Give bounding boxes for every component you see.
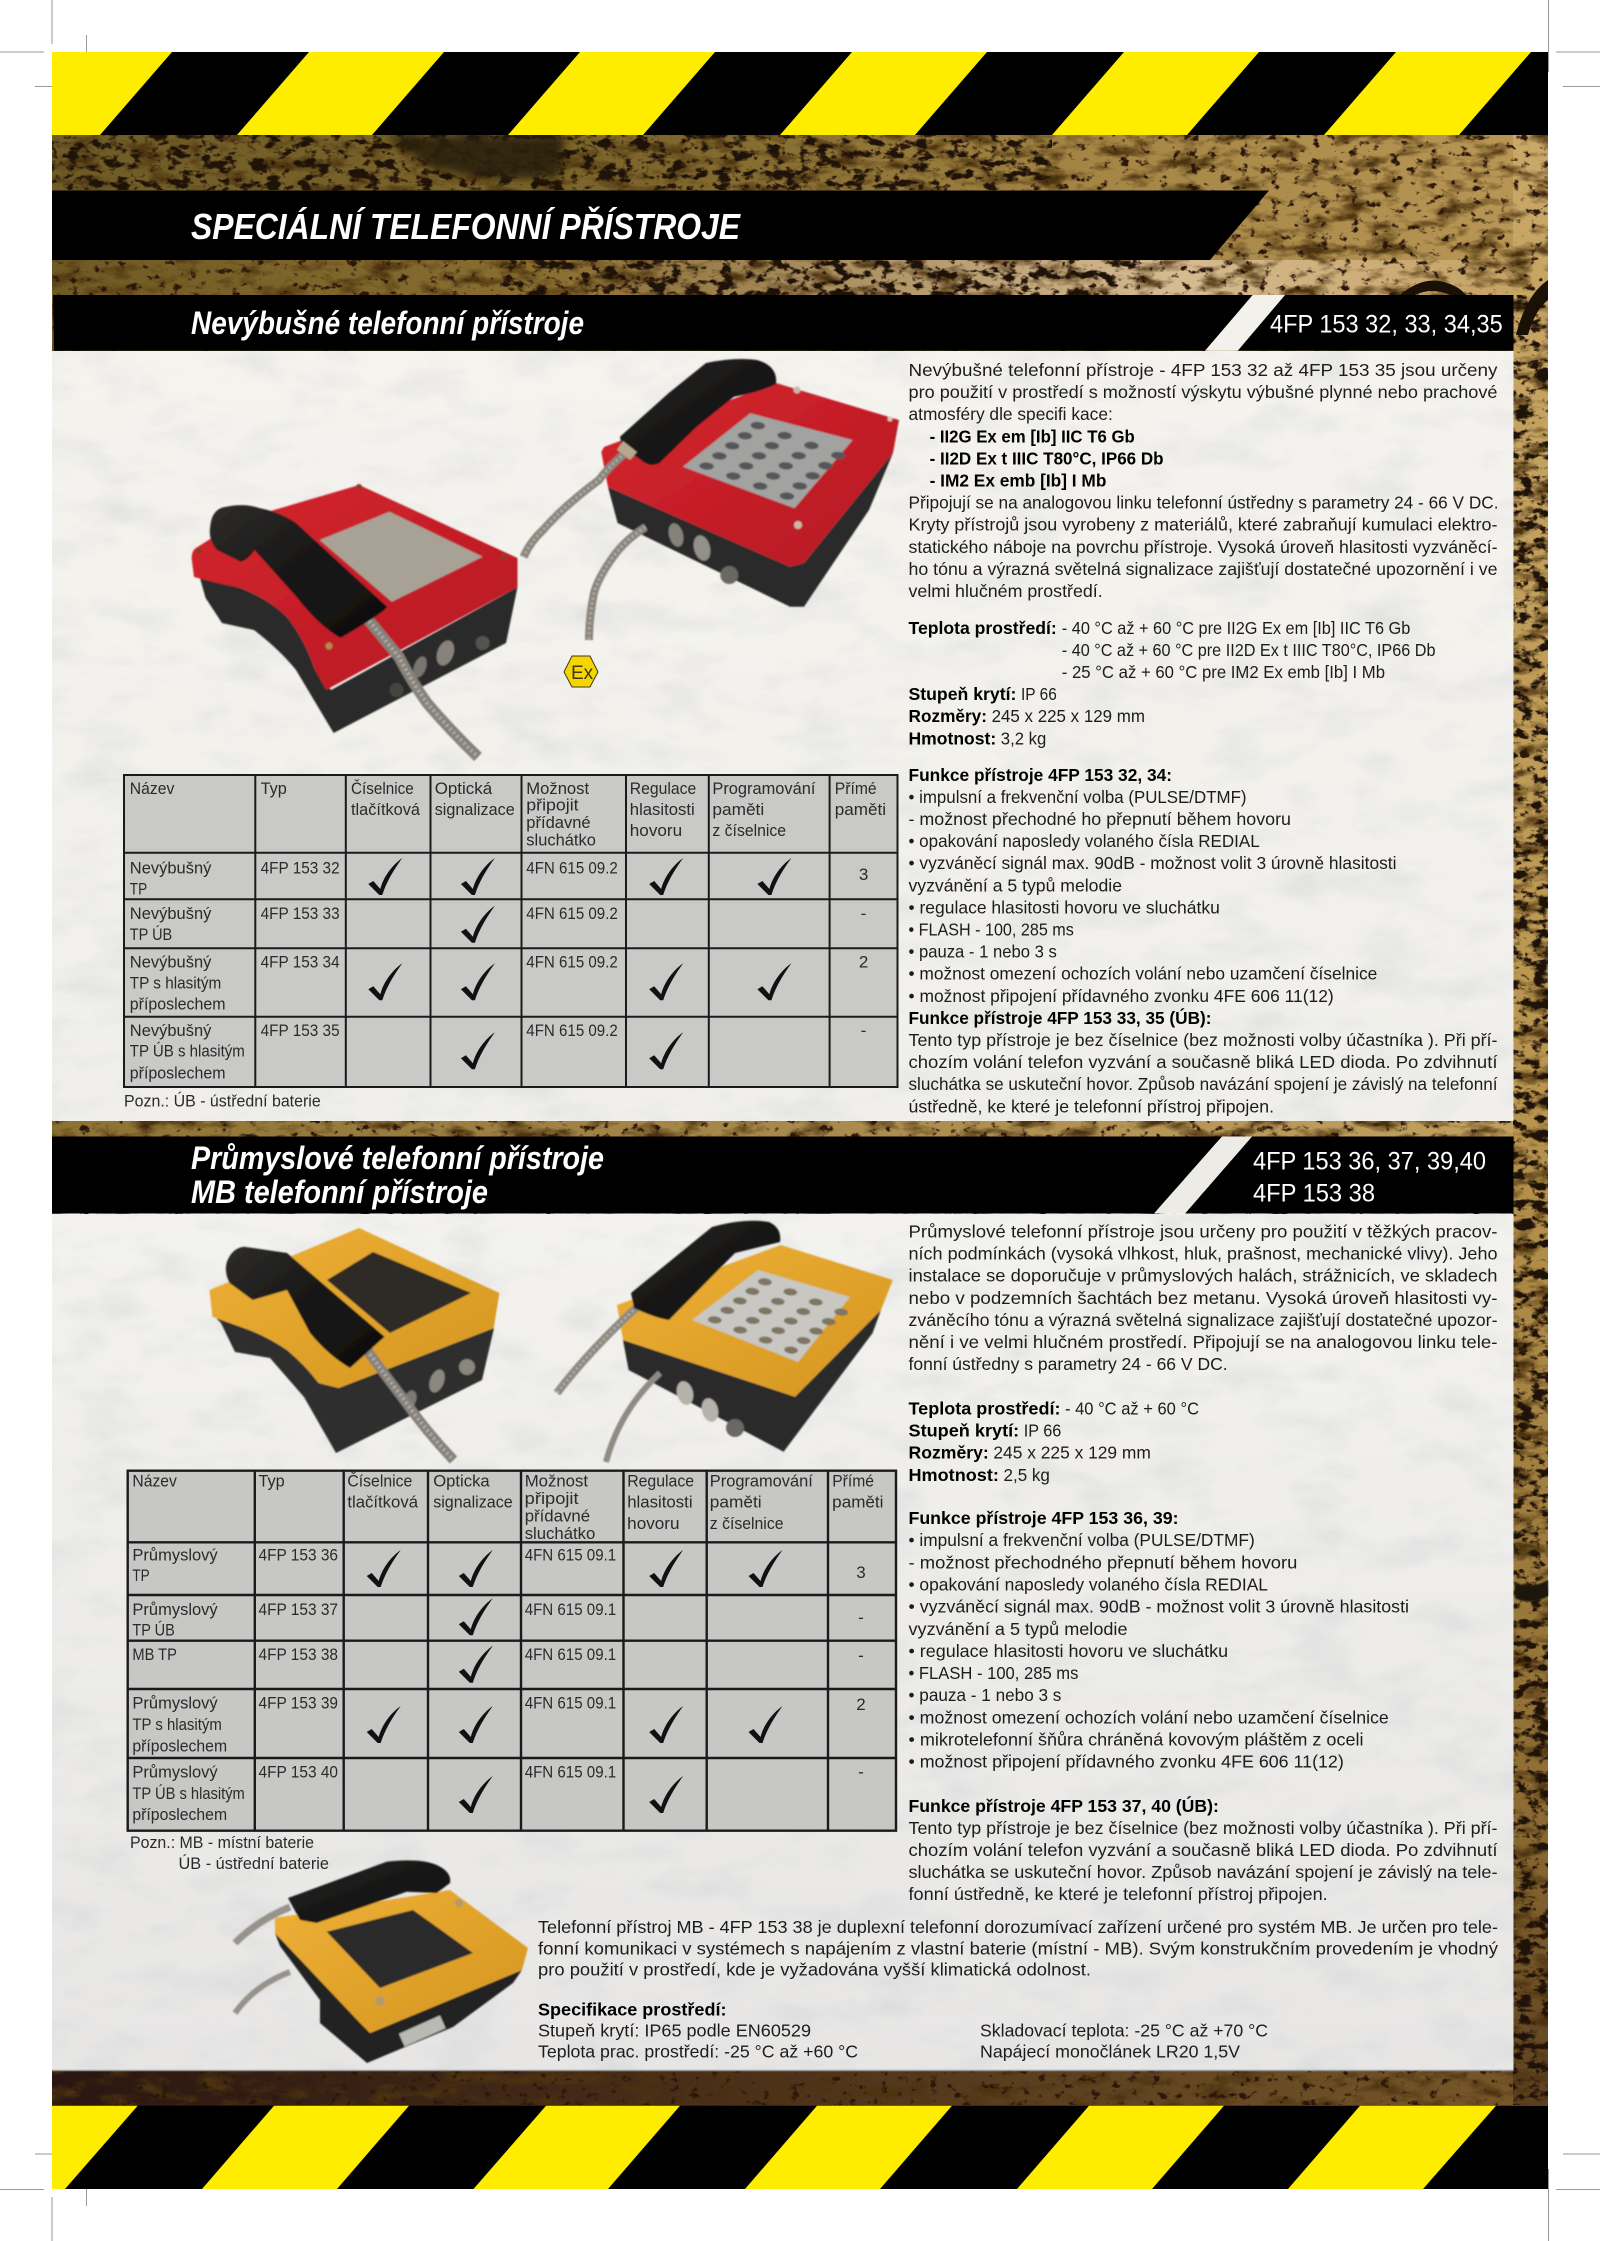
table row 4FP 153 32: Nevýbušný: [130, 858, 212, 877]
specifications: explosion-proof: [908, 618, 1436, 748]
description text: explosion-proof: Nevýbušné telefonní přístroje - 4FP 153 32 až 4FP 153 35 jsou určeny: [908, 360, 1498, 380]
table row 4FP 153 34: 4FN 615 09.2: [526, 952, 618, 971]
table header row: hovoru: [630, 821, 682, 840]
table header row: z číselnice: [710, 1514, 784, 1533]
section header bar: industrial: 4FP 153 36, 37, 39,40: [1253, 1148, 1486, 1176]
description text: industrial: zváněcího tónu a výrazná světelná signalizace zajišťují dostatečné upozor-: [908, 1310, 1498, 1330]
table row 4FP 153 37: [132, 1598, 864, 1640]
function list: industrial: Funkce přístroje 4FP 153 37, 40 (ÚB):: [908, 1795, 1219, 1816]
photo: red phone without keypad: [192, 484, 518, 757]
description text: industrial: instalace se doporučuje v průmyslových halách, strážnicích, ve skladech: [908, 1266, 1498, 1286]
specifications: industrial: [908, 1398, 1199, 1485]
description text: explosion-proof: [908, 360, 1498, 601]
table row 4FP 153 39: příposlechem: [132, 1737, 227, 1756]
icon: Ex hazard hexagon: [564, 656, 598, 687]
function list: explosion-proof: • možnost omezení ochozích volání nebo uzamčení číselnice: [908, 964, 1377, 984]
table header row: signalizace: [433, 1493, 513, 1512]
table: industrial models: [128, 1471, 896, 1831]
table header row: hlasitosti: [627, 1493, 693, 1512]
table header row: paměti: [835, 800, 886, 819]
description text: explosion-proof: Připojují se na analogovou linku telefonní ústředny s parametry 24 - 66 V DC.: [908, 493, 1498, 513]
specifications: industrial: 2,5 kg: [1004, 1465, 1050, 1485]
table header row: připojit: [526, 796, 579, 815]
table header row: z číselnice: [712, 821, 786, 840]
description text: explosion-proof: ho tónu a výrazná světelná signalizace zajišťují dostatečné upozornění i ve: [908, 559, 1498, 579]
table row 4FP 153 34: 2: [859, 952, 868, 971]
section header bar: explosion-proof: 4FP 153 32, 33, 34,35: [1270, 311, 1503, 339]
table header row: Programování: [712, 779, 816, 798]
table row 4FP 153 36: Průmyslový: [132, 1546, 218, 1565]
function list: explosion-proof: chozím volání telefon vyzvání a současně bliká LED dioda. Po zdvihnutí: [908, 1052, 1498, 1072]
table row 4FP 153 37: 4FN 615 09.1: [525, 1600, 616, 1619]
function list: industrial: • FLASH - 100, 285 ms: [908, 1663, 1079, 1683]
table row 4FP 153 36: 4FN 615 09.1: [525, 1546, 616, 1565]
table row 4FP 153 40: 4FP 153 40: [258, 1763, 338, 1782]
function list: industrial: chozím volání telefon vyzvání a současně bliká LED dioda. Po zdvihnutí: [908, 1840, 1498, 1860]
description text: MB phone: [538, 1917, 1498, 1980]
table row 4FP 153 32: 3: [859, 865, 868, 884]
table header row: Číselnice: [351, 779, 414, 798]
description text: industrial: nebo v podzemních šachtách bez metanu. Vysoká úroveň hlasitosti vy-: [908, 1288, 1498, 1308]
table row 4FP 153 40: [132, 1763, 864, 1824]
table row 4FP 153 37: 4FP 153 37: [258, 1600, 338, 1619]
table header row: [132, 1472, 883, 1543]
table row 4FP 153 36: TP: [132, 1566, 150, 1585]
function list: industrial: • vyzváněcí signál max. 90dB - možnost volit 3 úrovně hlasitosti: [908, 1597, 1409, 1617]
function list: explosion-proof: • možnost připojení přídavného zvonku 4FE 606 11(12): [908, 986, 1334, 1006]
function list: industrial: vyzvánění a 5 typů melodie: [908, 1619, 1128, 1639]
table footnote: Pozn.: MB - místní baterie: [130, 1833, 314, 1852]
description text: explosion-proof: - IM2 Ex emb [Ib] I Mb: [930, 470, 1106, 490]
photo: yellow phone with keypad: [557, 1221, 893, 1462]
table row 4FP 153 38: MB TP: [132, 1645, 177, 1664]
function list: explosion-proof: vyzvánění a 5 typů melodie: [908, 875, 1122, 895]
table row 4FP 153 34: 4FP 153 34: [261, 952, 340, 971]
table row 4FP 153 34: příposlechem: [130, 994, 226, 1013]
table row 4FP 153 37: -: [858, 1608, 864, 1627]
table header row: Název: [130, 779, 175, 798]
table row 4FP 153 33: TP ÚB: [130, 925, 172, 944]
function list: industrial: • možnost omezení ochozích volání nebo uzamčení číselnice: [908, 1707, 1389, 1727]
table row 4FP 153 33: Nevýbušný: [130, 904, 212, 923]
table row 4FP 153 36: [132, 1546, 866, 1587]
table header row: Programování: [710, 1472, 813, 1491]
specifications: explosion-proof: - 40 °C až + 60 °C pre II2G Ex em [Ib] IIC T6 Gb: [1062, 618, 1410, 638]
table row 4FP 153 32: 4FN 615 09.2: [526, 858, 618, 877]
table row 4FP 153 34: TP s hlasitým: [130, 973, 221, 992]
function list: explosion-proof: • vyzváněcí signál max. 90dB - možnost volit 3 úrovně hlasitosti: [908, 853, 1396, 873]
table row 4FP 153 35: příposlechem: [130, 1063, 226, 1082]
table header row: Název: [132, 1472, 177, 1491]
table row 4FP 153 33: 4FP 153 33: [261, 904, 340, 923]
function list: industrial: • opakování naposledy volaného čísla REDIAL: [908, 1574, 1268, 1594]
function list: explosion-proof: • FLASH - 100, 285 ms: [908, 920, 1074, 940]
description text: explosion-proof: - II2D Ex t IIIC T80°C, IP66 Db: [930, 448, 1164, 468]
description text: explosion-proof: - II2G Ex em [Ib] IIC T6 Gb: [930, 426, 1135, 446]
specifications: MB phone: Stupeň krytí: IP65 podle EN60529: [538, 2021, 811, 2041]
table header row: paměti: [712, 800, 764, 819]
table row 4FP 153 39: Průmyslový: [132, 1693, 218, 1712]
function list: explosion-proof: Funkce přístroje 4FP 153 32, 34:: [908, 765, 1172, 785]
photo: yellow phone without keypad: [210, 1228, 499, 1460]
table row 4FP 153 40: Průmyslový: [132, 1763, 218, 1782]
specifications: explosion-proof: IP 66: [1021, 684, 1057, 704]
table row 4FP 153 35: 4FP 153 35: [261, 1021, 340, 1040]
table row 4FP 153 37: TP ÚB: [132, 1621, 175, 1640]
table header row: připojit: [525, 1489, 579, 1508]
table header row: Číselnice: [347, 1472, 412, 1491]
table header row: Typ: [258, 1472, 285, 1491]
section header bar: explosion-proof: [53, 295, 1514, 351]
table row 4FP 153 32: TP: [130, 879, 147, 898]
function list: industrial: - možnost přechodného přepnutí během hovoru: [908, 1552, 1297, 1572]
specifications: industrial: Stupeň krytí:: [908, 1420, 1019, 1440]
table row 4FP 153 37: Průmyslový: [132, 1600, 218, 1619]
function list: explosion-proof: [908, 765, 1498, 1116]
table header row: tlačítková: [347, 1493, 419, 1512]
function list: explosion-proof: sluchátka se uskuteční hovor. Způsob navázání spojení je závislý na telefonní: [908, 1074, 1498, 1094]
table row 4FP 153 32: [130, 858, 868, 898]
function list: explosion-proof: • opakování naposledy volaného čísla REDIAL: [908, 831, 1260, 851]
function list: explosion-proof: • impulsní a frekvenční volba (PULSE/DTMF): [908, 787, 1246, 807]
table row 4FP 153 33: [130, 904, 866, 944]
table header row: Přímé: [835, 779, 877, 798]
table row 4FP 153 36: 4FP 153 36: [258, 1546, 338, 1565]
table header row: sluchátko: [526, 831, 596, 850]
table header row: Opticka: [433, 1472, 490, 1491]
specifications: industrial: 245 x 225 x 129 mm: [993, 1443, 1151, 1463]
section header bar: industrial: MB telefonní přístroje: [191, 1174, 488, 1210]
function list: explosion-proof: Tento typ přístroje je bez číselnice (bez možnosti volby účastníka ). Při pří-: [908, 1030, 1498, 1050]
specifications: MB phone: Teplota prac. prostředí: -25 °C až +60 °C: [538, 2042, 858, 2062]
table footnote: Pozn.: ÚB - ústřední baterie: [124, 1092, 321, 1111]
table header row: Typ: [261, 779, 287, 798]
specifications: MB phone: Napájecí monočlánek LR20 1,5V: [980, 2042, 1240, 2062]
table row 4FP 153 35: Nevýbušný: [130, 1021, 212, 1040]
table row 4FP 153 35: 4FN 615 09.2: [526, 1021, 618, 1040]
panel: industrial and MB telephones: [52, 1136, 1514, 2071]
section header bar: industrial: 4FP 153 38: [1253, 1180, 1375, 1208]
table row 4FP 153 39: [132, 1693, 866, 1756]
description text: explosion-proof: Kryty přístrojů jsou vyrobeny z materiálů, které zabraňují kumulaci elektro-: [908, 515, 1498, 535]
table row 4FP 153 33: -: [861, 904, 866, 923]
description text: explosion-proof: velmi hlučném prostředí.: [908, 581, 1103, 601]
description text: MB phone: Telefonní přístroj MB - 4FP 153 38 je duplexní telefonní dorozumívací zařízení určené pro systém MB. Je určen pro tele-: [538, 1917, 1498, 1937]
table header row: hlasitosti: [630, 800, 695, 819]
specifications: industrial: Teplota prostředí:: [908, 1398, 1060, 1418]
specifications: explosion-proof: - 25 °C až + 60 °C pre IM2 Ex emb [Ib] I Mb: [1062, 662, 1385, 682]
specifications: industrial: IP 66: [1024, 1420, 1061, 1440]
function list: explosion-proof: • pauza - 1 nebo 3 s: [908, 942, 1057, 962]
function list: industrial: • regulace hlasitosti hovoru ve sluchátku: [908, 1641, 1228, 1661]
panel: explosion-proof telephones: [52, 295, 1514, 1121]
function list: industrial: fonní ústředně, ke které je telefonní přístroj připojen.: [908, 1884, 1328, 1904]
specifications: industrial: - 40 °C až + 60 °C: [1065, 1398, 1199, 1418]
specifications: MB phone: Specifikace prostředí:: [538, 2000, 726, 2020]
specifications: MB phone: [538, 2000, 1268, 2062]
specifications: explosion-proof: Stupeň krytí:: [908, 684, 1016, 704]
table header row: přídavné: [525, 1507, 590, 1526]
table row 4FP 153 35: [130, 1021, 866, 1082]
description text: industrial: fonní ústředny s parametry 24 - 66 V DC.: [908, 1354, 1228, 1374]
function list: explosion-proof: - možnost přechodné ho přepnutí během hovoru: [908, 809, 1291, 829]
table row 4FP 153 32: 4FP 153 32: [261, 858, 340, 877]
description text: MB phone: fonní komunikaci v systémech s napájením z vlastní baterie (místní - MB). Svým konstrukčním provedením je vhodný: [538, 1938, 1498, 1958]
description text: MB phone: pro použití v prostředí, kde je vyžadována vyšší klimatická odolnost.: [538, 1960, 1091, 1980]
table header row: signalizace: [435, 800, 515, 819]
specifications: explosion-proof: 3,2 kg: [1001, 728, 1046, 748]
description text: industrial: nění i ve velmi hlučném prostředí. Připojují se na analogovou linku tele-: [908, 1332, 1498, 1352]
specifications: explosion-proof: Hmotnost:: [908, 728, 996, 748]
table row 4FP 153 34: [130, 952, 868, 1013]
main title bar: [52, 190, 1269, 260]
top hazard stripe band: [52, 52, 1548, 135]
table row 4FP 153 38: [132, 1645, 864, 1683]
table row 4FP 153 36: 3: [856, 1563, 866, 1582]
function list: industrial: Funkce přístroje 4FP 153 36, 39:: [908, 1508, 1178, 1528]
table row 4FP 153 40: 4FN 615 09.1: [525, 1763, 616, 1782]
table row 4FP 153 40: příposlechem: [132, 1805, 227, 1824]
table row 4FP 153 35: -: [861, 1021, 866, 1040]
table footnote: [130, 1833, 329, 1873]
table header row: hovoru: [627, 1514, 680, 1533]
photo: red phone with keypad: [524, 359, 899, 640]
function list: industrial: Tento typ přístroje je bez číselnice (bez možnosti volby účastníka ). Při pří-: [908, 1818, 1498, 1838]
specifications: explosion-proof: Teplota prostředí:: [908, 618, 1057, 638]
section header bar: industrial: [52, 1136, 1514, 1214]
description text: explosion-proof: statického náboje na povrchu přístroje. Vysoká úroveň hlasitosti vyzváněcí-: [908, 537, 1498, 557]
description text: industrial: [908, 1221, 1498, 1374]
table header row: Regulace: [630, 779, 696, 798]
table header row: tlačítková: [351, 800, 421, 819]
description text: explosion-proof: pro použití v prostředí s možností výskytu výbušné plynné nebo prachové: [908, 382, 1498, 402]
table row 4FP 153 39: TP s hlasitým: [132, 1715, 222, 1734]
table header row: paměti: [832, 1493, 884, 1512]
specifications: MB phone: Skladovací teplota: -25 °C až +70 °C: [980, 2021, 1268, 2041]
function list: explosion-proof: • regulace hlasitosti hovoru ve sluchátku: [908, 897, 1220, 917]
table header row: Regulace: [627, 1472, 694, 1491]
table header row: přídavné: [526, 813, 591, 832]
title: SPECIÁLNÍ TELEFONNÍ PŘÍSTROJE: [191, 205, 741, 247]
function list: industrial: sluchátka se uskuteční hovor. Způsob navázání spojení je závislý na tele-: [908, 1862, 1498, 1882]
specifications: explosion-proof: - 40 °C až + 60 °C pre II2D Ex t IIIC T80°C, IP66 Db: [1062, 640, 1436, 660]
table header row: Možnost: [526, 779, 589, 798]
table header row: Optická: [435, 779, 493, 798]
icon: Ex hazard hexagon: Ex: [571, 663, 594, 684]
section header bar: explosion-proof: Nevýbušné telefonní přístroje: [191, 305, 584, 341]
specifications: explosion-proof: 245 x 225 x 129 mm: [992, 706, 1145, 726]
description text: explosion-proof: atmosféry dle specifi kace:: [908, 404, 1113, 424]
description text: industrial: Průmyslové telefonní přístroje jsou určeny pro použití v těžkých pracov-: [908, 1221, 1498, 1241]
section header bar: industrial: Průmyslové telefonní přístroje: [191, 1140, 604, 1176]
function list: industrial: • pauza - 1 nebo 3 s: [908, 1685, 1062, 1705]
function list: explosion-proof: Funkce přístroje 4FP 153 33, 35 (ÚB):: [908, 1007, 1212, 1028]
table header row: [130, 779, 886, 850]
table row 4FP 153 35: TP ÚB s hlasitým: [130, 1042, 245, 1061]
bottom hazard stripe band: [52, 2106, 1548, 2189]
function list: explosion-proof: ústředně, ke které je telefonní přístroj připojen.: [908, 1096, 1274, 1116]
specifications: industrial: Rozměry:: [908, 1443, 989, 1463]
table row 4FP 153 39: 4FP 153 39: [258, 1693, 338, 1712]
table footnote: ÚB - ústřední baterie: [178, 1854, 329, 1873]
table: explosion-proof models: [124, 775, 898, 1087]
table row 4FP 153 39: 4FN 615 09.1: [525, 1693, 616, 1712]
function list: industrial: [908, 1508, 1498, 1904]
table row 4FP 153 33: 4FN 615 09.2: [526, 904, 618, 923]
table row 4FP 153 40: TP ÚB s hlasitým: [132, 1784, 245, 1803]
table row 4FP 153 38: 4FN 615 09.1: [525, 1645, 616, 1664]
table header row: Přímé: [832, 1472, 874, 1491]
table header row: sluchátko: [525, 1524, 595, 1543]
table row 4FP 153 39: 2: [856, 1695, 866, 1714]
function list: industrial: • impulsní a frekvenční volba (PULSE/DTMF): [908, 1530, 1255, 1550]
table row 4FP 153 38: 4FP 153 38: [258, 1645, 338, 1664]
table header row: Možnost: [525, 1472, 588, 1491]
function list: industrial: • možnost připojení přídavného zvonku 4FE 606 11(12): [908, 1752, 1344, 1772]
table row 4FP 153 34: Nevýbušný: [130, 952, 212, 971]
photo: MB phone: [235, 1860, 528, 2063]
function list: industrial: • mikrotelefonní šňůra chráněná kovovým pláštěm z oceli: [908, 1730, 1364, 1750]
table row 4FP 153 38: -: [858, 1646, 864, 1665]
table header row: paměti: [710, 1493, 762, 1512]
specifications: explosion-proof: Rozměry:: [908, 706, 987, 726]
specifications: industrial: Hmotnost:: [908, 1465, 999, 1485]
table row 4FP 153 40: -: [858, 1763, 864, 1782]
description text: industrial: ních podmínkách (vysoká vlhkost, hluk, prašnost, mechanické vlivy). Jeho: [908, 1244, 1498, 1264]
